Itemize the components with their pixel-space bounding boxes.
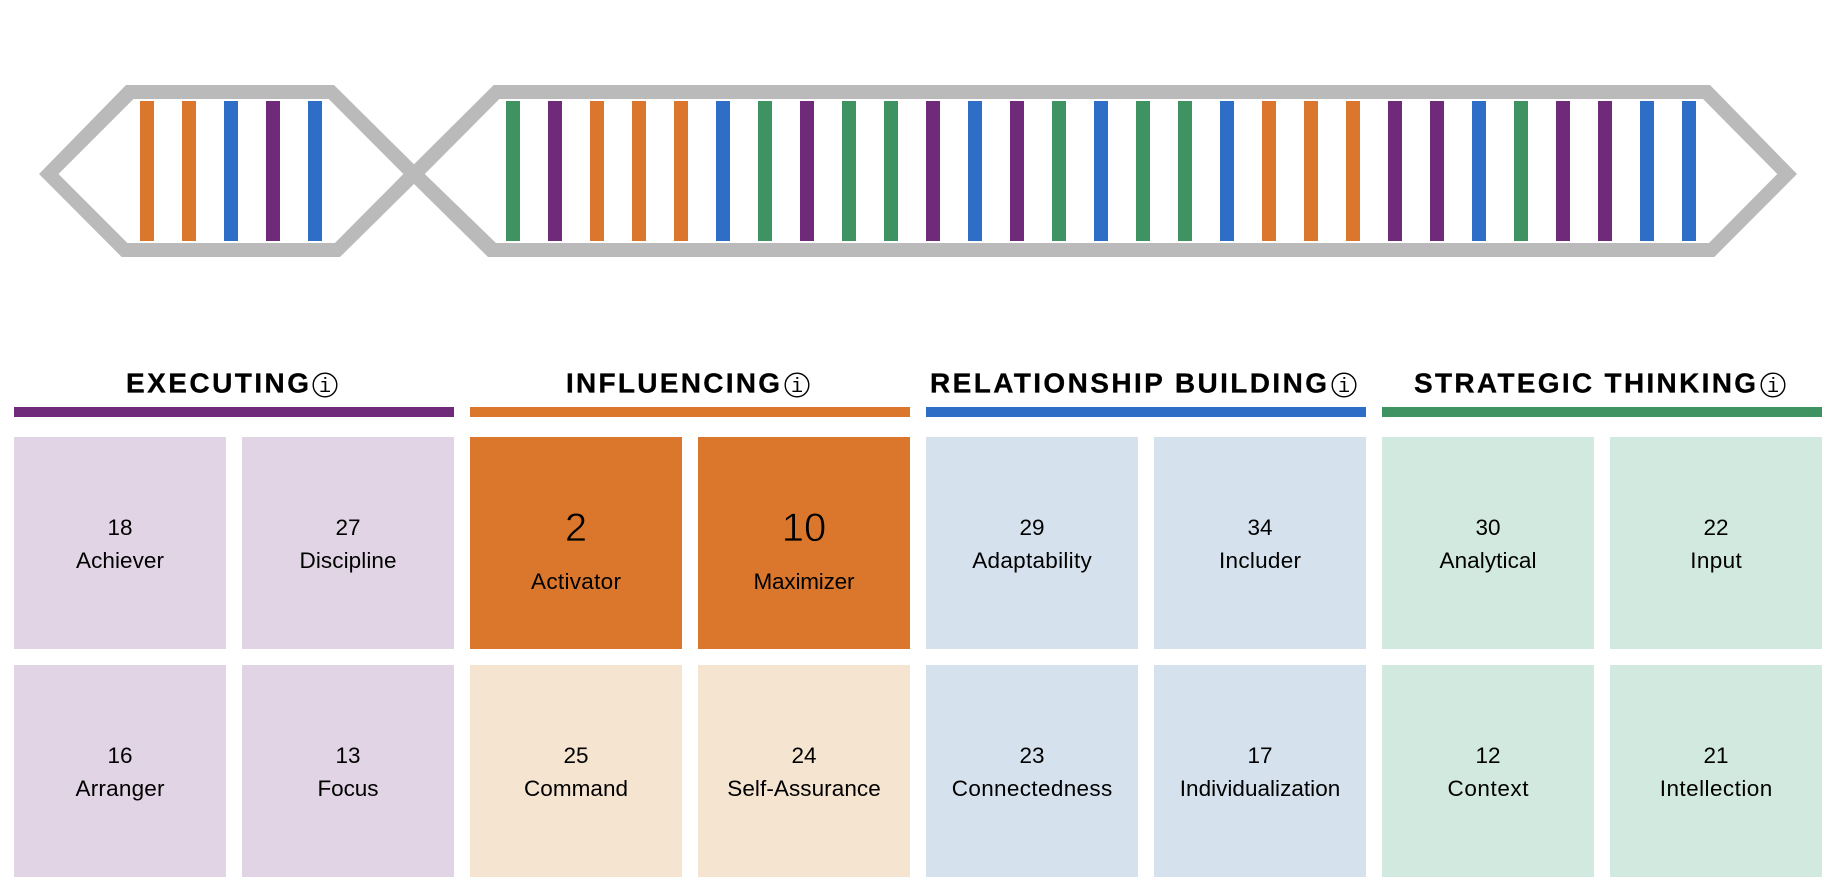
category bar: influencing <box>470 407 910 417</box>
heading: executing: EXECUTING <box>126 368 309 398</box>
category bar: relationship building <box>926 407 1366 417</box>
tile: Focus: 13 <box>335 743 361 768</box>
tile: Intellection: 21 <box>1703 743 1729 768</box>
tile: Maximizer (highlighted): Maximizer <box>754 569 855 594</box>
tile: Command: 25 <box>563 743 589 768</box>
tile: Focus: Focus <box>318 776 378 801</box>
tile: Analytical: Analytical <box>1440 548 1536 573</box>
tile: Self-Assurance <box>698 665 910 877</box>
tile: Focus <box>242 665 454 877</box>
tile: Intellection: Intellection <box>1660 776 1772 801</box>
rungs: second helix section <box>506 101 1696 241</box>
tile: Arranger <box>14 665 226 877</box>
tile: Connectedness: 23 <box>1019 743 1045 768</box>
heading: strategic thinking: STRATEGIC THINKING <box>1414 368 1756 398</box>
tile: Adaptability: 29 <box>1019 515 1045 540</box>
tile: Arranger: Arranger <box>76 776 165 801</box>
tile: Command <box>470 665 682 877</box>
tile: Discipline <box>242 437 454 649</box>
tile: Analytical: 30 <box>1475 515 1501 540</box>
tile: Includer <box>1154 437 1366 649</box>
tile: Maximizer (highlighted): 10 <box>782 506 826 550</box>
panel: relationship building <box>926 368 1366 877</box>
tile: Achiever: 18 <box>107 515 133 540</box>
tile: Achiever <box>14 437 226 649</box>
tile: Maximizer (highlighted) <box>698 437 910 649</box>
tile: Analytical <box>1382 437 1594 649</box>
tile: Arranger: 16 <box>107 743 133 768</box>
tile: Includer: Includer <box>1219 548 1302 573</box>
icon: info executing <box>313 373 337 399</box>
panel: executing <box>14 368 454 877</box>
tile: Individualization: Individualization <box>1180 776 1340 801</box>
tile: Includer: 34 <box>1247 515 1273 540</box>
tile: Individualization: 17 <box>1247 743 1273 768</box>
panel: strategic thinking <box>1382 368 1822 877</box>
tile: Activator (highlighted): Activator <box>531 569 622 594</box>
tile: Input: 22 <box>1703 515 1729 540</box>
tile: Self-Assurance: 24 <box>791 743 817 768</box>
tile: Intellection <box>1610 665 1822 877</box>
heading: influencing: INFLUENCING <box>566 368 780 398</box>
category bar: executing <box>14 407 454 417</box>
tile: Discipline: 27 <box>335 515 361 540</box>
tile: Achiever: Achiever <box>76 548 164 573</box>
tile: Adaptability: Adaptability <box>972 548 1092 573</box>
tile: Input <box>1610 437 1822 649</box>
icon: info strategic thinking <box>1761 373 1785 399</box>
tile: Activator (highlighted) <box>470 437 682 649</box>
tile: Discipline: Discipline <box>300 548 396 573</box>
tile: Context <box>1382 665 1594 877</box>
tile: Context: 12 <box>1475 743 1501 768</box>
tile: Input: Input <box>1690 548 1742 573</box>
tile: Connectedness <box>926 665 1138 877</box>
icon: info executing: i <box>319 376 331 399</box>
tile: Self-Assurance: Self-Assurance <box>727 776 881 801</box>
tile: Adaptability <box>926 437 1138 649</box>
tile: Activator (highlighted): 2 <box>565 506 587 550</box>
tile: Connectedness: Connectedness <box>952 776 1112 801</box>
icon: info relationship building <box>1332 373 1356 399</box>
helix outline <box>39 85 1797 257</box>
DNA helix strand diagram <box>39 85 1797 257</box>
tile: Command: Command <box>524 776 628 801</box>
tile: Individualization <box>1154 665 1366 877</box>
icon: info influencing <box>785 373 809 399</box>
rungs: first helix section <box>140 101 322 241</box>
heading: relationship building: RELATIONSHIP BUILDING <box>930 368 1327 398</box>
icon: info strategic thinking: i <box>1767 376 1779 399</box>
icon: info relationship building: i <box>1338 376 1350 399</box>
category bar: strategic thinking <box>1382 407 1822 417</box>
panel: influencing <box>470 368 910 877</box>
tile: Context: Context <box>1448 776 1529 801</box>
icon: info influencing: i <box>791 376 803 399</box>
